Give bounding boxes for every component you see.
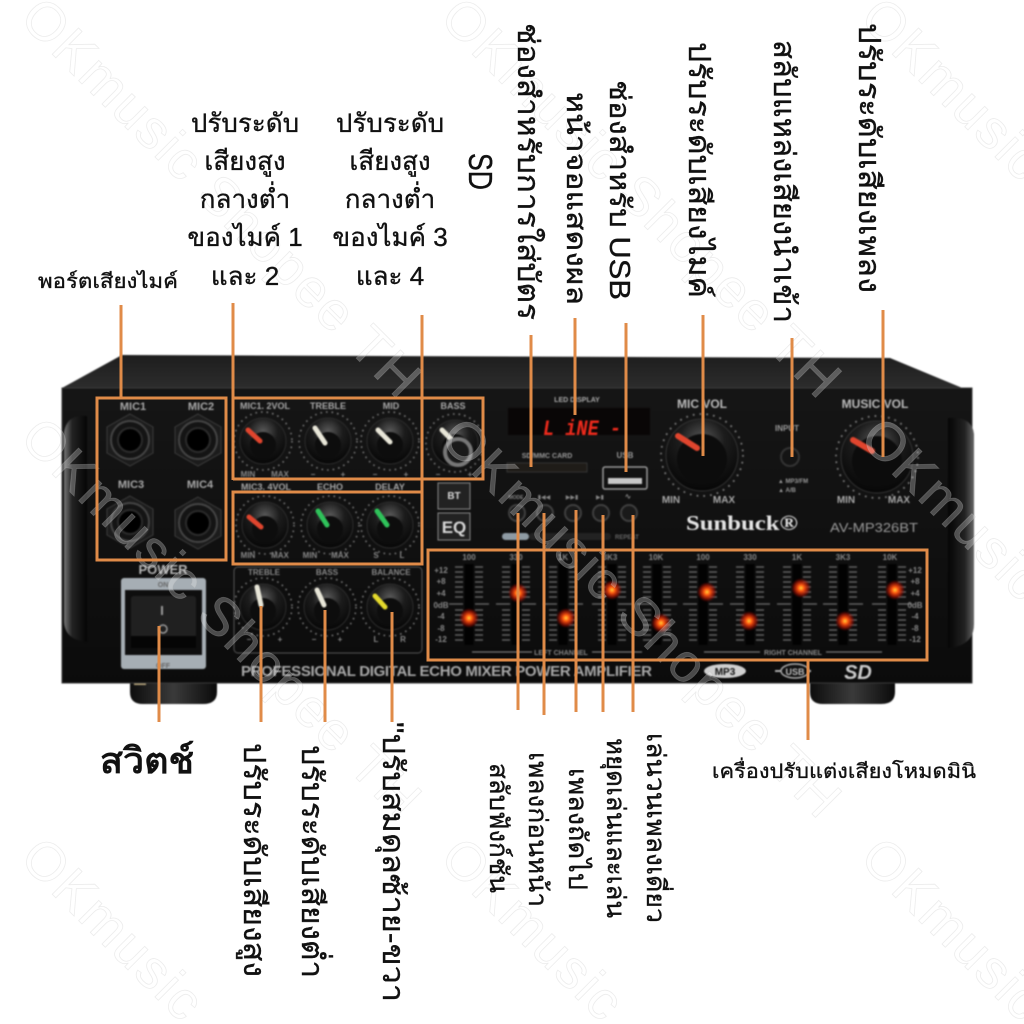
label: EQ for mics 1 and 2: และ 2 [211,261,279,291]
label: EQ for mics 1 and 2: ของไมค์ 1 [187,222,303,252]
label: EQ for mics 3 and 4: และ 4 [356,261,424,291]
amplifier front panel [62,388,972,683]
knob row 2: mic 3/4, echo, delay: MIC3. 4VOL [241,482,292,492]
equalizer sliders: 10K [649,553,664,562]
equalizer sliders: +4 [436,589,446,598]
label: mini equalizer: เครื่องปรับแต่งเสียงโหมดมินิ [712,757,976,783]
knob row 1: mic 1/2: MID [383,401,400,411]
LED display and media slots: SD/MMC CARD [522,453,572,460]
equalizer sliders: 100 [462,553,476,562]
music volume knob: MIN [837,495,855,506]
knob row 1: mic 1/2: + [468,470,473,479]
mic jacks [107,401,221,549]
equalizer sliders: -12 [435,635,447,644]
equalizer sliders: -8 [437,624,445,633]
knob row 2: mic 3/4, echo, delay [236,482,419,560]
label: input switch: สลับแหล่งเสียงนำเข้า [767,40,800,323]
mic volume knob: MAX [713,495,735,506]
mic jacks: MIC1 [120,401,146,413]
music volume knob: MAX [888,495,910,506]
brand and model: Sunbuck® [686,511,798,535]
power switch [121,562,206,670]
label: treble: ปรับระดับเสียงสูง [236,743,270,977]
knob row 2: mic 3/4, echo, delay: MIN [241,551,256,560]
mic volume knob: MIC VOL [677,397,727,411]
equalizer sliders: +12 [434,566,448,575]
label: EQ for mics 1 and 2: กลางต่ำ [200,181,290,214]
knob row 2: mic 3/4, echo, delay: S [373,551,379,560]
label: bass: ปรับระดับเสียงต่ำ [295,745,333,978]
knob row 1: mic 1/2: − [311,470,316,479]
label: play pause: หยุดเล่นและเล่น [600,738,631,918]
knob row 2: mic 3/4, echo, delay: DELAY [375,482,405,492]
transport buttons: ∿ [625,492,631,501]
knob row 3: treble, bass, balance: L [374,635,379,644]
mic jacks: MIC4 [187,479,214,491]
equalizer sliders: 330 [509,553,523,562]
transport buttons: ▶▶▮ [566,495,578,501]
knob row 3: treble, bass, balance: − [312,635,317,644]
mic volume knob: MIN [662,495,680,506]
power switch: POWER [138,562,188,577]
equalizer sliders: 10K [883,553,898,562]
equalizer sliders: 3K3 [603,553,618,562]
knob row 2: mic 3/4, echo, delay: MIN [303,551,318,560]
knob row 3: treble, bass, balance: BALANCE [371,568,411,577]
mic jacks: MIC3 [118,479,144,491]
music volume knob: MUSIC VOL [842,397,908,411]
knob row 3: treble, bass, balance: R [400,635,406,644]
input selector: ▲ MP3/FM [778,479,808,485]
knob row 1: mic 1/2: + [404,470,409,479]
label: display: หน้าจอแสดงผล [561,92,592,305]
equalizer sliders: 1K [558,553,568,562]
equalizer sliders: 100 [696,553,710,562]
left handle [64,416,87,642]
mic volume knob [661,397,743,506]
music volume knob [836,397,918,506]
LED display and media slots [507,397,650,489]
label: repeat: เล่นวนเพลงเดี่ยว [641,733,674,923]
power switch: OFF [156,663,171,670]
label: EQ for mics 3 and 4: ของไมค์ 3 [332,222,448,252]
label: previous track: เพลงก่อนหน้า [523,752,553,907]
label: EQ for mics 1 and 2: เสียงสูง [204,146,286,177]
watermarks: OKmusic Shopee TH [430,406,854,830]
LED display and media slots: L iNE - [543,417,621,442]
transport buttons: ▮◀◀ [538,495,551,501]
equalizer sliders: -4 [911,612,919,621]
equalizer sliders: -12 [909,635,921,644]
BT and EQ badges: BT [447,491,461,502]
equalizer sliders: 0dB [907,601,923,610]
BT and EQ badges [438,483,470,540]
label: card slot: ช่องสำหรับการใส่บัตร [511,23,545,320]
amplifier feet [130,680,895,704]
knob row 1: mic 1/2: TREBLE [310,401,346,411]
equalizer sliders: RIGHT CHANNEL [764,650,823,657]
model banner: PROFESSIONAL DIGITAL ECHO MIXER POWER AMPLIFIER [241,663,652,680]
knob row 1: mic 1/2: − [373,470,378,479]
equalizer sliders: 330 [743,553,757,562]
right handle [948,418,974,648]
label: EQ for mics 3 and 4: ปรับระดับ [336,108,444,138]
equalizer sliders: 3K3 [836,553,851,562]
label: EQ for mics 1 and 2: ปรับระดับ [191,108,299,138]
label: EQ for mics 3 and 4 [332,108,448,291]
amplifier [62,355,974,704]
mic jacks: MIC2 [188,401,214,413]
knob row 1: mic 1/2 [234,401,484,479]
knob row 2: mic 3/4, echo, delay: L [400,551,405,560]
brand and model [686,511,918,535]
knob row 1: mic 1/2: BASS [440,401,466,411]
equalizer sliders: 0dB [433,601,449,610]
label: EQ for mics 3 and 4: กลางต่ำ [345,181,435,214]
transport buttons: REPEAT [615,535,639,541]
equalizer sliders: +8 [436,577,446,586]
input selector: INPUT [775,424,799,433]
equalizer sliders: +8 [910,577,920,586]
equalizer sliders: -4 [437,612,445,621]
label: power switch: สวิตช์ [100,740,194,781]
label: mic volume: ปรับระดับเสียงไมค์ [682,42,717,298]
transport buttons: MODE [508,495,524,501]
format logos: SD [844,662,872,684]
amplifier top cover [62,355,972,392]
brand and model: AV-MP326BT [830,520,918,535]
LED display and media slots: LED DISPLAY [554,397,600,404]
label: music volume: ปรับระดับเสียงเพลง [852,23,885,293]
knob row 1: mic 1/2: MIN [241,470,256,479]
knob row 3: treble, bass, balance [234,567,422,653]
knob row 1: mic 1/2: MAX [271,470,290,479]
knob row 3: treble, bass, balance: BASS [316,568,339,577]
equalizer sliders: +12 [908,566,922,575]
LED display and media slots: USB [617,451,634,460]
knob row 2: mic 3/4, echo, delay: MAX [331,551,350,560]
label: mode: สลับฟังก์ชัน [484,763,514,893]
knob row 1: mic 1/2: + [341,470,346,479]
format logos [704,662,872,684]
equalizer sliders: 1K [792,553,802,562]
label: USB slot: ช่องสำหรับ USB [603,80,635,300]
BT and EQ badges: EQ [442,518,466,537]
watermarks: OKmusic Shopee TH [10,406,434,830]
equalizer sliders: LEFT CHANNEL [534,650,589,657]
equalizer sliders: -8 [911,624,919,633]
knob row 3: treble, bass, balance: − [247,635,252,644]
knob row 1: mic 1/2: MIC1. 2VOL [240,401,291,411]
knob row 1: mic 1/2: − [436,470,441,479]
label: balance: "ปรับสมดุลซ้าย-ขวา [374,722,409,1002]
equalizer sliders [433,553,923,657]
knob row 3: treble, bass, balance: + [338,635,343,644]
transport buttons [502,492,639,541]
input selector: ▲ A/B [778,488,797,494]
format logos: USB [785,667,805,677]
format logos: MP3 [715,667,736,678]
knob row 2: mic 3/4, echo, delay: MAX [271,551,290,560]
label: SD: SD [462,153,499,190]
transport buttons: ▶▮ [596,495,604,501]
label: EQ for mics 1 and 2 [187,108,303,291]
knob row 3: treble, bass, balance: + [278,635,283,644]
orange callout boxes and leader lines [97,303,927,740]
label: next track: เพลงถัดไป [563,768,593,890]
label: mic ports: พอร์ตเสียงไมค์ [38,270,178,293]
input selector [775,424,808,494]
knob row 2: mic 3/4, echo, delay: ECHO [317,482,343,492]
knob row 3: treble, bass, balance: TREBLE [248,568,281,577]
label: EQ for mics 3 and 4: เสียงสูง [349,146,431,177]
power switch: ON [158,582,168,589]
equalizer sliders: +4 [910,589,920,598]
